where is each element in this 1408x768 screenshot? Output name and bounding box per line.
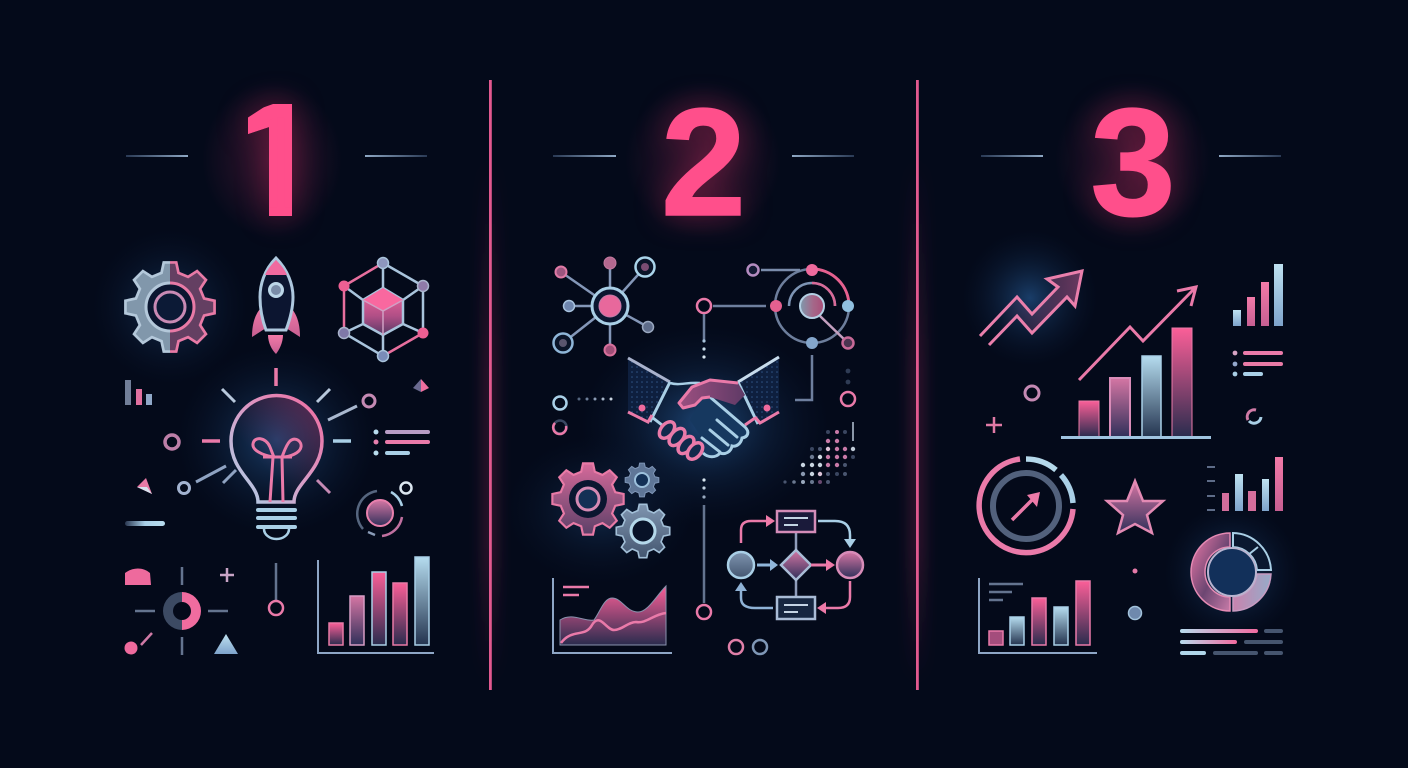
icon: bar chart [979,578,1097,653]
icon: connector ring [697,299,766,359]
heading rules 2 [553,155,854,157]
number 1: 1 [234,78,320,249]
icon: plus [220,568,234,582]
icon: rocket [252,258,300,354]
icon: pink cap [125,568,151,585]
list lines [374,430,430,456]
mini arc [1247,410,1261,423]
icon: gear [125,262,215,352]
bar chart [318,557,434,653]
elbow connector [795,355,812,400]
small pointer shape [137,478,152,494]
progress lines [1180,629,1283,655]
icon: triangle [214,634,238,654]
list lines [1233,351,1283,376]
panel 2 [552,77,863,654]
icon: target orbit [357,482,412,536]
number 2: 2 [661,77,746,248]
panel 1 [124,78,434,655]
icon: dot and dash [124,633,152,654]
rings pair [729,640,767,654]
gradient dash [125,521,165,526]
plus [986,417,1002,433]
number 3: 3 [1090,77,1176,248]
heading rules 1 [126,155,427,157]
divider: right [914,80,920,690]
icon: rising mini bars [1233,264,1283,326]
small ring with dots [553,396,612,434]
small dots [1128,568,1142,620]
icon: cube network [338,258,428,362]
icon: orbit cluster [748,264,854,349]
background glows [92,82,1300,640]
icon: flowchart [728,511,863,619]
icon: hub network [554,257,654,356]
icon: growth bar chart [1061,287,1211,439]
icon: zigzag arrow [980,271,1082,345]
heading rules 3 [981,155,1281,157]
icon: donut with ticks [135,567,228,655]
icon: area chart [553,578,672,653]
icon: gauge [979,459,1073,553]
icon: small prism [413,379,429,392]
icon: handshake [628,357,779,462]
vertical pin connector [697,478,711,619]
divider: left [487,80,493,690]
icon: mini bars [125,380,152,405]
icon: light bulb with rays [165,368,375,539]
icon: dot matrix [783,430,855,484]
panel 3 [979,77,1283,655]
icon: donut [1191,533,1271,611]
icon: star [1107,481,1163,533]
pin connector [269,563,283,615]
ring [1025,386,1039,400]
ring and dots [841,369,855,441]
icon: gear cluster [552,463,670,558]
icon: small bar chart with ticks [1207,457,1283,511]
